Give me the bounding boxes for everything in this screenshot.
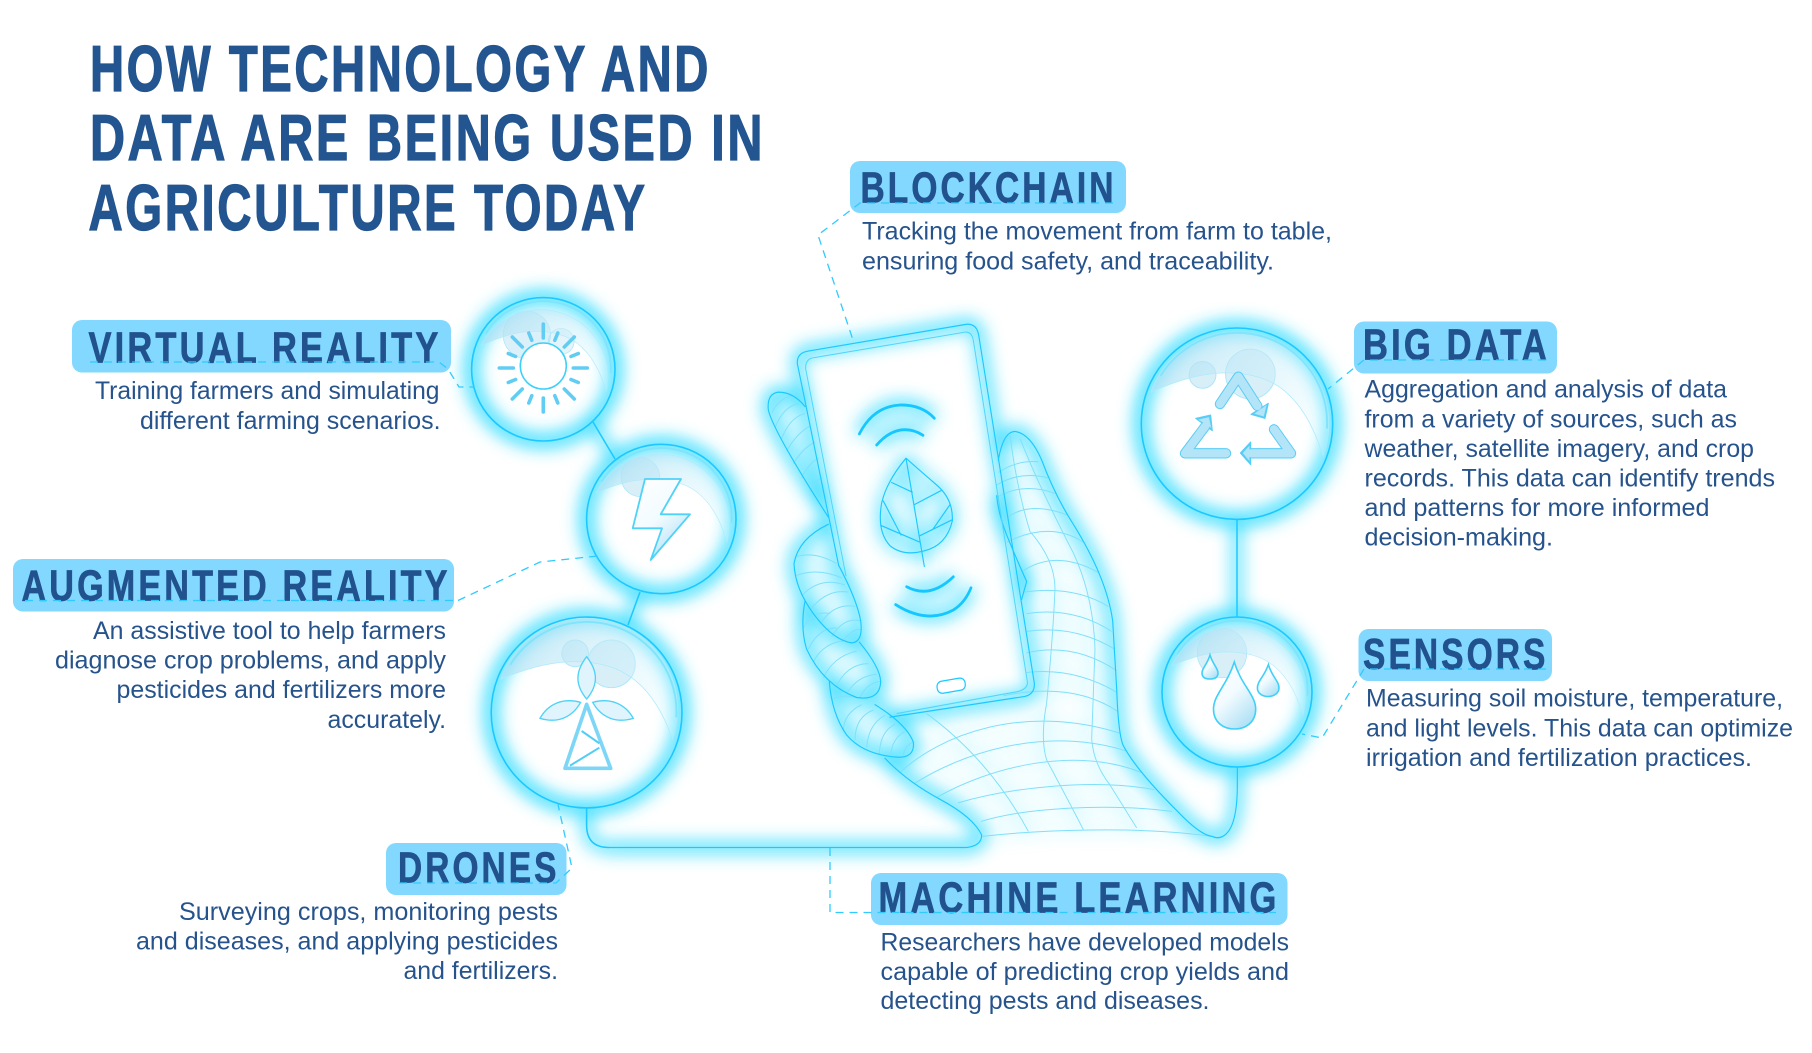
title: DATA ARE BEING USED IN: [90, 101, 765, 174]
dashed leader: sensors: [1302, 669, 1546, 738]
circle: water drops icon: [1162, 617, 1312, 767]
dashed leader: big data: [1328, 360, 1546, 389]
label: big data: BIG DATA: [1363, 322, 1550, 370]
text: sensors: Measuring soil moisture, temperature,: [1366, 684, 1783, 712]
circle: wind turbine icon: [491, 617, 682, 808]
panel: augmented reality: [13, 556, 598, 734]
hand mesh: [772, 396, 1212, 836]
panel: machine learning: [830, 848, 1289, 1015]
phone home button: [936, 677, 966, 694]
text: big data: Aggregation and analysis of data: [1364, 376, 1727, 404]
text: big data: records. This data can identify trends: [1364, 464, 1775, 492]
label: augmented reality: AUGMENTED REALITY: [22, 562, 450, 610]
hand outline: [609, 392, 1237, 847]
text: drones: Surveying crops, monitoring pests: [179, 898, 558, 926]
turbine blades and tower: [540, 657, 633, 768]
text: big data: decision-making.: [1364, 524, 1553, 552]
label: machine learning: MACHINE LEARNING: [878, 874, 1280, 922]
circle: lightning icon: [587, 444, 736, 594]
phone body: [797, 324, 1034, 717]
text: drones: [136, 898, 558, 985]
text: augmented reality: [55, 617, 446, 734]
text: drones: and diseases, and applying pesticides: [136, 928, 558, 956]
text: drones: and fertilizers.: [404, 957, 558, 985]
text: blockchain: Tracking the movement from farm to table,: [862, 218, 1332, 246]
water drops: [1202, 655, 1279, 729]
sun core: [520, 343, 566, 389]
text: augmented reality: accurately.: [328, 706, 446, 734]
text: sensors: and light levels. This data can optimize: [1366, 714, 1793, 742]
text: sensors: irrigation and fertilization practices.: [1366, 744, 1752, 772]
panel: blockchain: [818, 161, 1332, 340]
text: big data: from a variety of sources, such as: [1364, 406, 1737, 434]
text: augmented reality: An assistive tool to help farmers: [93, 617, 446, 645]
illustration: hand holding phone: [609, 324, 1237, 847]
text: sensors: [1366, 684, 1793, 772]
text: machine learning: Researchers have developed models: [880, 928, 1289, 956]
circle: recycling icon: [1141, 328, 1333, 519]
dashed leader: machine learning: [830, 848, 1276, 912]
panel: big data: [1328, 322, 1775, 552]
connector wires between circles: [587, 422, 1237, 848]
icon: signal waves: [859, 405, 971, 616]
text: virtual reality: Training farmers and simulating: [95, 377, 440, 405]
title: [88, 32, 765, 244]
panel: drones: [136, 804, 572, 985]
label: virtual reality: VIRTUAL REALITY: [88, 324, 442, 372]
glow halo behind all neon artwork: [472, 298, 1333, 848]
text: augmented reality: pesticides and fertilizers more: [116, 676, 446, 704]
text: virtual reality: different farming scenarios.: [140, 407, 440, 435]
icon: leaf: [880, 458, 952, 566]
sun rays: [499, 324, 587, 412]
dashed leader: virtual reality: [90, 362, 474, 387]
title: AGRICULTURE TODAY: [88, 171, 648, 244]
label: sensors: SENSORS: [1363, 631, 1548, 679]
text: machine learning: detecting pests and diseases.: [880, 987, 1210, 1015]
dashed leader: drones: [399, 804, 572, 883]
lightning bolt: [633, 479, 690, 560]
circle: sun icon: [472, 298, 615, 441]
dashed leader: blockchain: [818, 203, 1113, 340]
text: machine learning: capable of predicting crop yields and: [880, 958, 1289, 986]
text: big data: [1364, 376, 1775, 552]
title: HOW TECHNOLOGY AND: [90, 32, 711, 105]
text: blockchain: ensuring food safety, and traceability.: [862, 248, 1274, 276]
text: big data: and patterns for more informed: [1364, 494, 1710, 522]
text: big data: weather, satellite imagery, and crop: [1364, 435, 1754, 463]
text: augmented reality: diagnose crop problems, and apply: [55, 646, 446, 674]
text: virtual reality: [95, 377, 440, 435]
panel: sensors: [1302, 629, 1793, 772]
label: drones: DRONES: [398, 844, 560, 892]
dashed leader: augmented reality: [25, 556, 598, 600]
panel: virtual reality: [72, 320, 474, 435]
text: blockchain: [862, 218, 1332, 276]
text: machine learning: [880, 928, 1289, 1015]
recycling arrows: [1185, 377, 1291, 465]
label: blockchain: BLOCKCHAIN: [860, 164, 1116, 212]
